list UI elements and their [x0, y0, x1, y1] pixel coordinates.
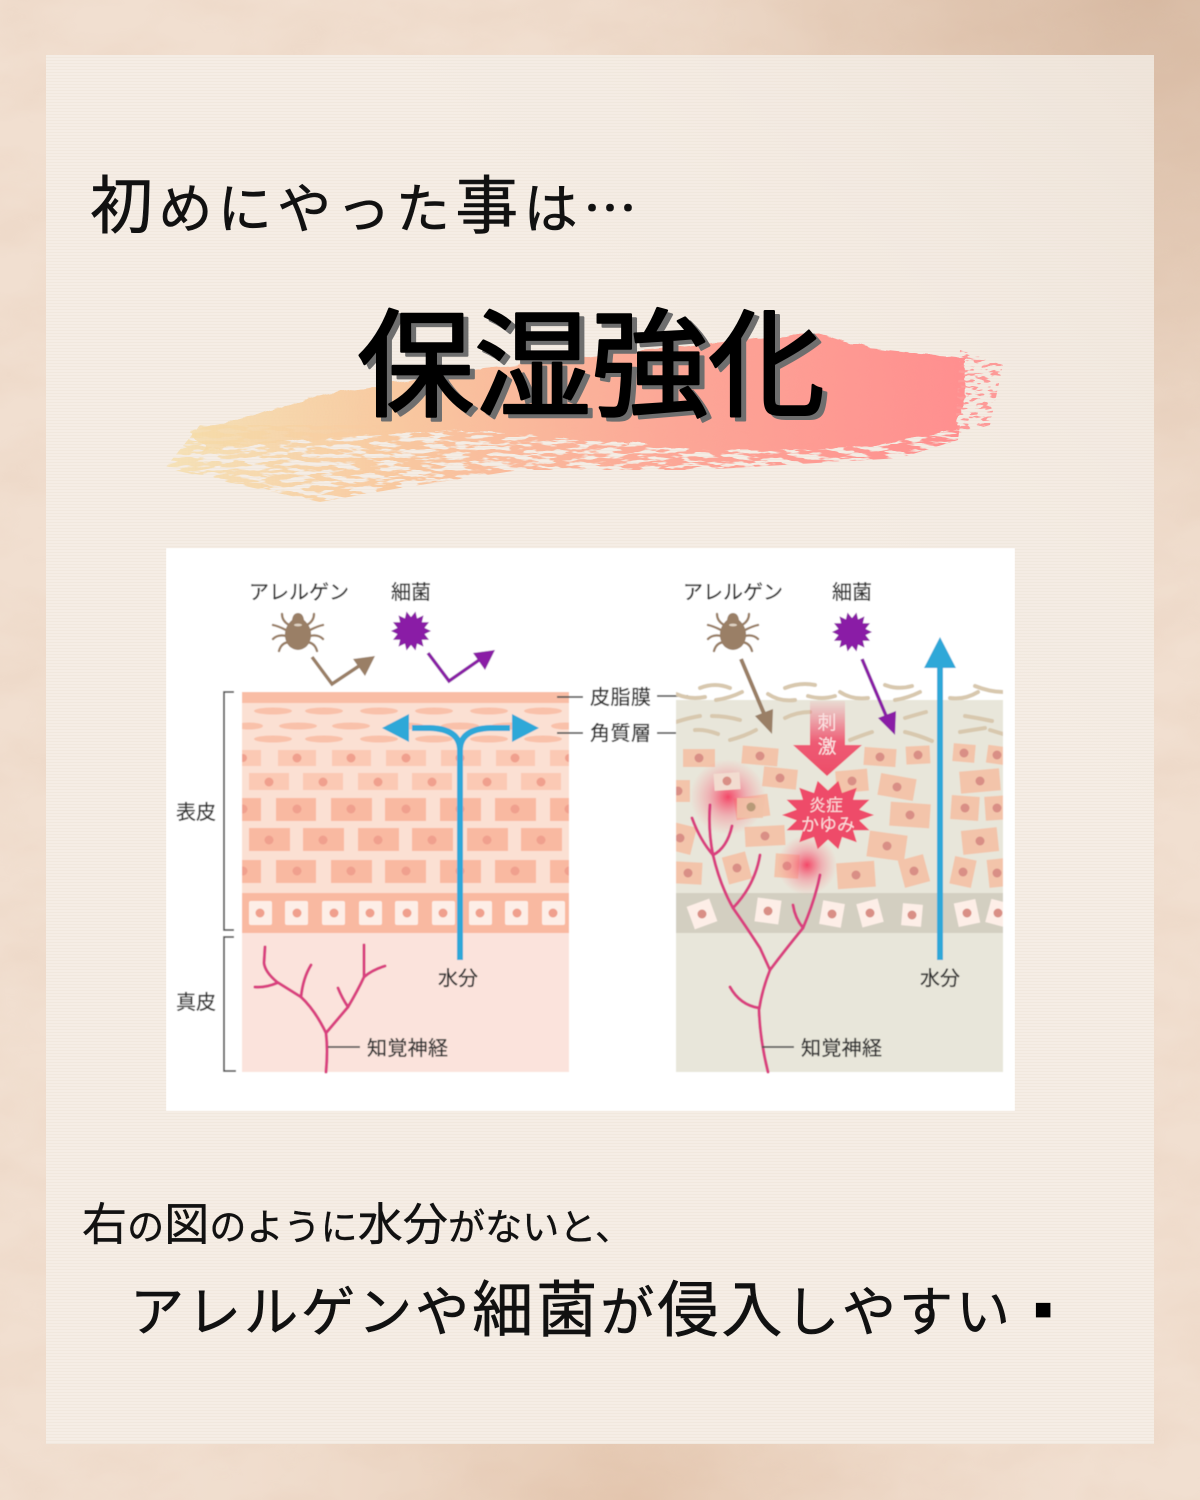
- labels: left diagram: 真皮: [176, 991, 216, 1014]
- brush stroke behind heading: [165, 334, 1003, 502]
- badge: inflammation and itch: [782, 781, 874, 849]
- heading: 保湿強化: 保湿強化: [362, 275, 830, 445]
- inflammation glow 2: [782, 838, 834, 892]
- labels: right diagram: 細菌: [832, 581, 872, 604]
- arrow: stimulus: 激: [817, 736, 837, 758]
- labels: left diagram: 知覚神経: [367, 1037, 448, 1060]
- arrow: bacteria entering: [862, 659, 896, 735]
- arrow: bacteria bounced: [428, 650, 495, 681]
- caption line 2: アレルゲンや細菌が侵入しやすい: [130, 1276, 1010, 1344]
- arrow: stimulus: 刺: [817, 712, 837, 734]
- badge: inflammation and itch: 炎症: [809, 796, 843, 815]
- arrow: water spreading sideways: [382, 714, 539, 960]
- right nerve: [692, 805, 820, 1072]
- arrow: allergen bounced: [312, 656, 375, 684]
- labels: left diagram: 細菌: [391, 581, 431, 604]
- icon: mite right: [708, 613, 758, 651]
- arrow: water escaping: [924, 637, 956, 960]
- right diagram: damaged skin: [663, 684, 1011, 1072]
- labels: right diagram: 水分: [920, 967, 960, 990]
- labels: right diagram: 知覚神経: [801, 1037, 882, 1060]
- heading: 保湿強化: 保湿強化: [357, 271, 825, 441]
- left diagram: healthy skin: [223, 692, 580, 1072]
- labels: left diagram: 表皮: [176, 801, 216, 824]
- labels: centre layer names: 角質層: [590, 722, 651, 745]
- caption line 1: 右の図のように水分がないと、: [82, 1199, 632, 1250]
- labels: left diagram: アレルゲン: [249, 581, 349, 604]
- labels: right diagram: [683, 581, 960, 1060]
- labels: left diagram: [176, 581, 478, 1071]
- inflammation glow 1: [694, 762, 764, 832]
- labels: centre layer names: 皮脂膜: [590, 686, 651, 709]
- badge: inflammation and itch: かゆみ: [801, 815, 855, 835]
- labels: centre layer names: [557, 686, 688, 745]
- arrow: stimulus: [793, 701, 862, 776]
- labels: right diagram: アレルゲン: [683, 581, 783, 604]
- icon: bacteria right: [832, 612, 872, 652]
- arrow: allergen entering: [741, 659, 773, 734]
- icon: mite left: [273, 613, 323, 651]
- labels: left diagram: 水分: [438, 967, 478, 990]
- caption end mark: ■: [1034, 1293, 1052, 1326]
- icon: bacteria left: [391, 612, 431, 650]
- title: lead-in line: 初めにやった事は…: [90, 156, 637, 247]
- left nerve: [255, 945, 385, 1072]
- panel: skin diagram: [166, 548, 1015, 1111]
